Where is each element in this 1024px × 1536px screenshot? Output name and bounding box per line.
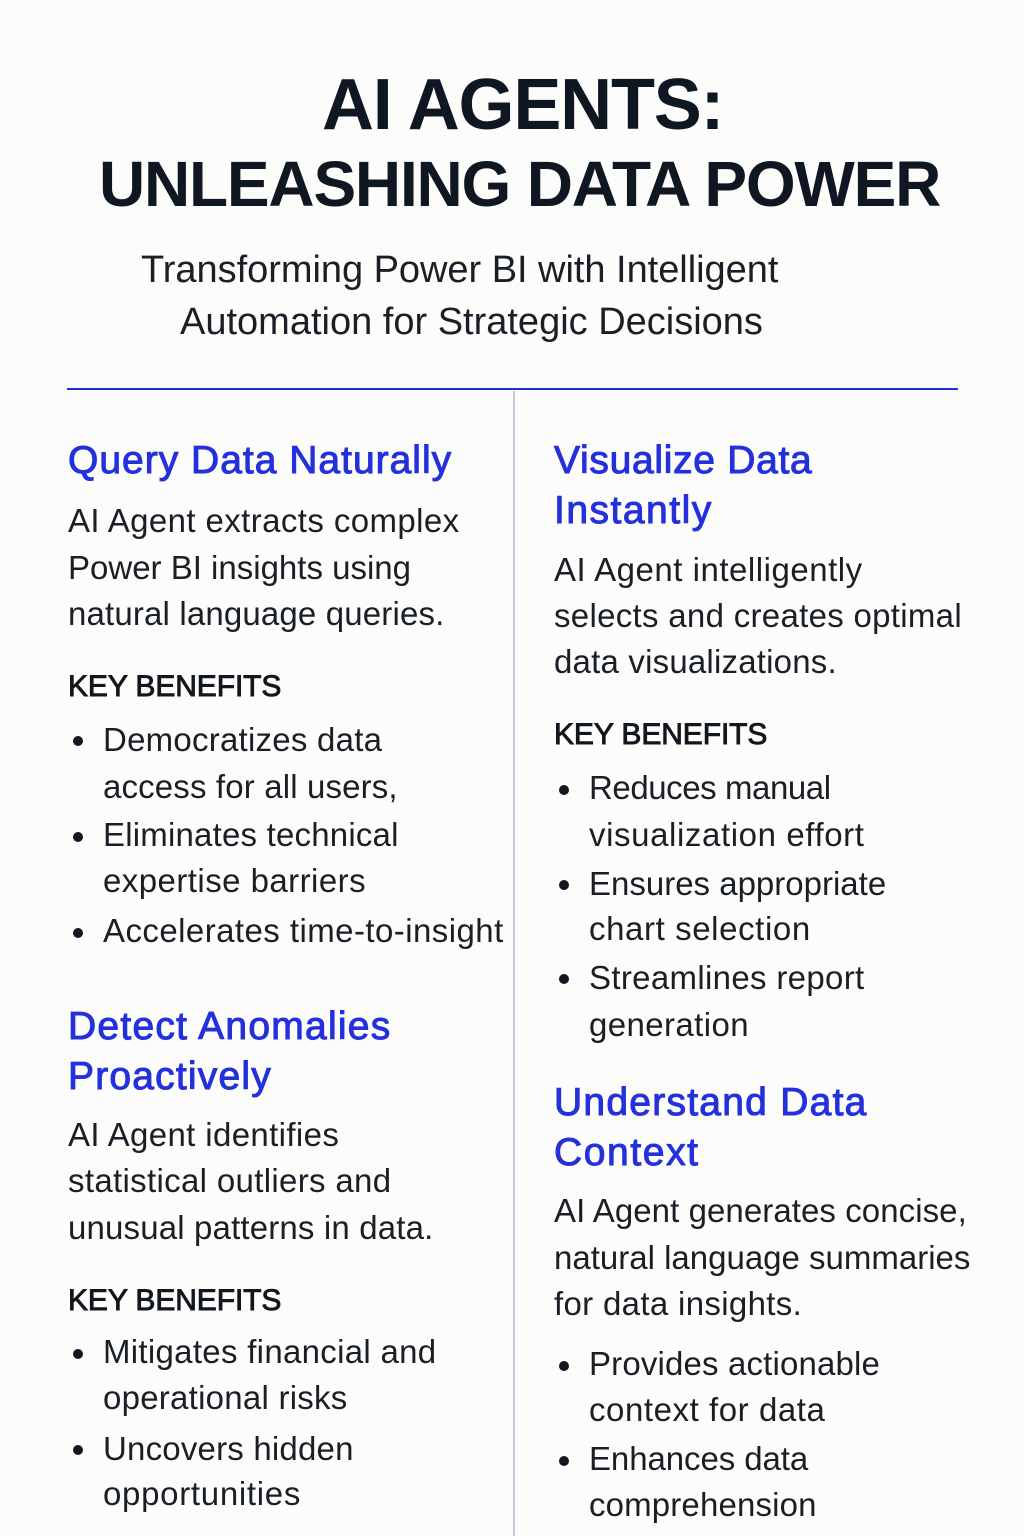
title: AI AGENTS: xyxy=(322,65,723,145)
panel: understand data context xyxy=(554,1081,970,1523)
label: key benefits: KEY BENEFITS xyxy=(554,718,767,751)
list: visualize benefits: Ensures appropriate xyxy=(589,865,886,902)
panel: detect anomalies proactively xyxy=(68,1005,436,1512)
text block: query description: Power BI insights using xyxy=(68,549,411,586)
text block: context description xyxy=(554,1192,970,1322)
list: visualize benefits xyxy=(559,769,886,1043)
list: visualize benefits: Reduces manual xyxy=(589,769,831,806)
list: anomalies benefits: Uncovers hidden xyxy=(103,1430,354,1467)
list: query benefits: Accelerates time-to-insight xyxy=(103,912,504,949)
heading: detect anomalies proactively: Proactively xyxy=(68,1055,272,1098)
title xyxy=(99,65,940,220)
list: visualize benefits: chart selection xyxy=(589,910,811,947)
subtitle: Transforming Power BI with Intelligent xyxy=(141,249,778,291)
list: anomalies benefits: opportunities xyxy=(103,1475,301,1512)
text block: visualize description: AI Agent intelligently xyxy=(554,551,863,588)
text block: visualize description xyxy=(554,551,962,680)
list: anomalies benefits: Mitigates financial and xyxy=(103,1333,436,1370)
list: context benefits: context for data xyxy=(589,1391,825,1428)
list: query benefits: Eliminates technical xyxy=(103,816,399,853)
subtitle xyxy=(141,249,778,343)
heading: detect anomalies proactively: Detect Anomalies xyxy=(68,1005,392,1048)
list: context benefits: Provides actionable xyxy=(589,1345,880,1382)
text block: context description: for data insights. xyxy=(554,1285,802,1322)
list: context benefits: comprehension xyxy=(589,1486,817,1523)
list: anomalies benefits: operational risks xyxy=(103,1379,348,1416)
heading: visualize data instantly: Instantly xyxy=(554,489,713,532)
heading: visualize data instantly: Visualize Data xyxy=(554,439,812,482)
text block: query description: natural language queries. xyxy=(68,595,444,632)
text block: anomalies description xyxy=(68,1116,433,1246)
label: key benefits: KEY BENEFITS xyxy=(68,1284,281,1317)
list: visualize benefits: visualization effort xyxy=(589,816,865,853)
list: query benefits: Democratizes data xyxy=(103,721,382,758)
list: visualize benefits: generation xyxy=(589,1006,749,1043)
list: query benefits: expertise barriers xyxy=(103,862,366,899)
text block: query description xyxy=(68,502,460,632)
text block: query description: AI Agent extracts complex xyxy=(68,502,460,539)
heading: query data naturally: Query Data Naturally xyxy=(68,439,452,482)
heading: understand data context: Context xyxy=(554,1131,700,1174)
text block: anomalies description: unusual patterns in data. xyxy=(68,1209,433,1246)
list: query benefits: access for all users, xyxy=(103,768,398,805)
text block: visualize description: data visualizations. xyxy=(554,643,837,680)
subtitle: Automation for Strategic Decisions xyxy=(180,301,763,343)
text block: context description: natural language summaries xyxy=(554,1239,970,1276)
list: visualize benefits: Streamlines report xyxy=(589,959,865,996)
list: context benefits xyxy=(559,1345,880,1523)
heading: understand data context xyxy=(554,1081,868,1174)
text block: anomalies description: AI Agent identifies xyxy=(68,1116,339,1153)
list: context benefits: Enhances data xyxy=(589,1440,808,1477)
list: query benefits xyxy=(73,721,504,949)
heading: visualize data instantly xyxy=(554,439,812,532)
title: UNLEASHING DATA POWER xyxy=(99,148,940,220)
heading: understand data context: Understand Data xyxy=(554,1081,868,1124)
panel: visualize data instantly xyxy=(554,439,962,1043)
list: anomalies benefits xyxy=(73,1333,436,1512)
text block: context description: AI Agent generates concise, xyxy=(554,1192,967,1229)
label: key benefits: KEY BENEFITS xyxy=(68,670,281,703)
text block: visualize description: selects and creates optimal xyxy=(554,597,962,634)
panel: query data naturally xyxy=(68,439,504,949)
text block: anomalies description: statistical outliers and xyxy=(68,1162,391,1199)
heading: detect anomalies proactively xyxy=(68,1005,392,1098)
